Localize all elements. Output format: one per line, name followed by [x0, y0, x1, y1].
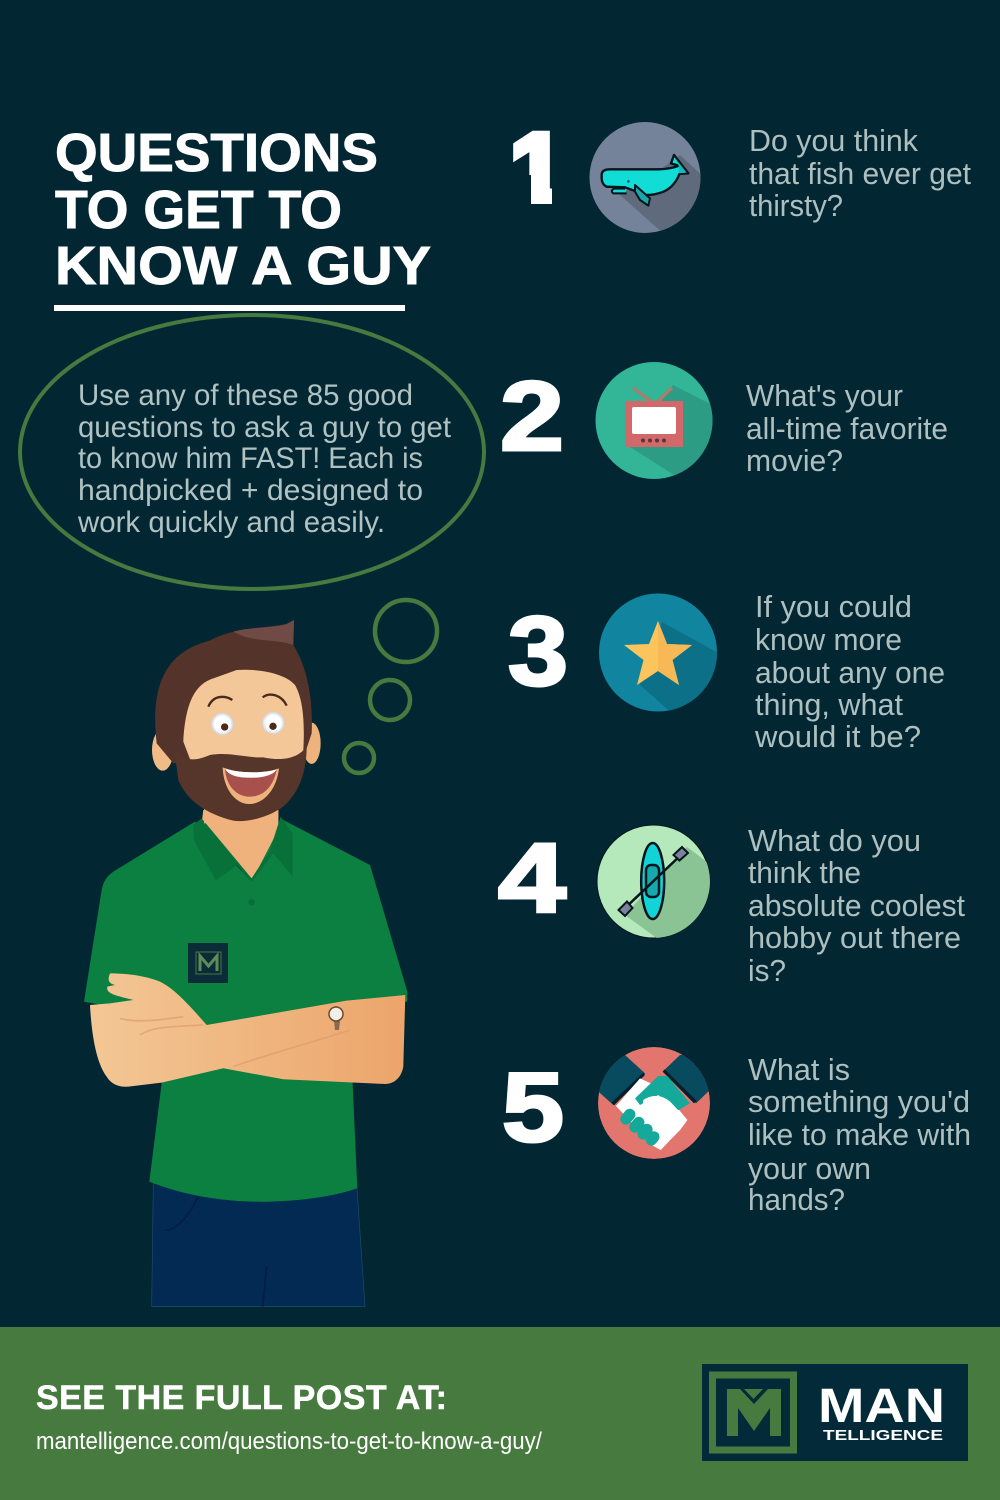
- question 1 text: Do you think: [749, 123, 918, 158]
- question 2 text: movie?: [746, 443, 843, 478]
- question 2 text: What's your: [746, 378, 903, 413]
- question 5 text: [748, 1052, 971, 1217]
- icon: handshake: [597, 1047, 712, 1159]
- title: QUESTIONS: [55, 123, 378, 183]
- question 5 text: your own: [748, 1151, 871, 1186]
- question 3 text: would it be?: [754, 719, 921, 754]
- icon: television: [596, 362, 722, 482]
- question 2 text: [746, 378, 948, 478]
- item 1: [510, 113, 971, 235]
- number 3: 3: [508, 596, 568, 706]
- question 4 text: What do you: [748, 823, 921, 858]
- character: man with crossed arms: [84, 620, 407, 1307]
- question 1 text: [749, 123, 971, 223]
- icon: star: [599, 594, 725, 716]
- question 5 text: something you'd: [748, 1084, 970, 1119]
- thought bubble with intro text: handpicked + designed to: [78, 474, 423, 507]
- icon: whale: [590, 122, 705, 235]
- footer band: [0, 1327, 1000, 1500]
- logo: [702, 1364, 968, 1461]
- question 4 text: hobby out there: [748, 920, 961, 955]
- head: [152, 620, 321, 823]
- footer heading: SEE THE FULL POST AT:: [36, 1379, 447, 1417]
- number 1: 1: [510, 113, 565, 223]
- thought bubbles: [344, 600, 437, 773]
- title underline: [54, 305, 405, 311]
- item 3: [508, 589, 945, 754]
- item 2: [500, 361, 948, 482]
- number 4: 4: [498, 823, 566, 933]
- logo: MAN: [818, 1380, 945, 1433]
- pants: [152, 1183, 365, 1307]
- item 5: [502, 1047, 971, 1217]
- wristwatch: [329, 1007, 343, 1030]
- question 3 text: thing, what: [755, 687, 903, 722]
- crossed arms: [90, 973, 405, 1087]
- question 1 text: thirsty?: [749, 188, 843, 223]
- thought bubble with intro text: to know him FAST! Each is: [78, 442, 423, 475]
- thought bubble with intro text: work quickly and easily.: [77, 506, 385, 539]
- title: TO GET TO: [55, 180, 342, 240]
- item 4: [498, 823, 965, 988]
- question 5 text: like to make with: [748, 1117, 971, 1152]
- icon: kayak: [597, 825, 715, 942]
- question 4 text: absolute coolest: [748, 888, 965, 923]
- question 3 text: about any one: [755, 655, 945, 690]
- question 4 text: is?: [748, 953, 786, 988]
- neck and shirt: [84, 810, 407, 1202]
- question 3 text: If you could: [755, 589, 912, 624]
- logo: TELLIGENCE: [823, 1427, 943, 1444]
- thought bubble with intro text: questions to ask a guy to get: [78, 411, 452, 444]
- shirt logo patch: [188, 943, 228, 983]
- question 5 text: hands?: [748, 1182, 845, 1217]
- question 3 text: [754, 589, 945, 754]
- question 5 text: What is: [748, 1052, 850, 1087]
- footer url: mantelligence.com/questions-to-get-to-know-a-guy/: [36, 1428, 542, 1455]
- thought bubble with intro text: [20, 315, 484, 589]
- title: [55, 123, 431, 296]
- title: KNOW A GUY: [55, 236, 431, 296]
- question 3 text: know more: [755, 622, 902, 657]
- question 2 text: all-time favorite: [746, 411, 948, 446]
- number 2: 2: [500, 361, 564, 471]
- question 4 text: think the: [748, 855, 861, 890]
- number 5: 5: [502, 1052, 564, 1162]
- question 4 text: [748, 823, 965, 988]
- question 1 text: that fish ever get: [749, 156, 971, 191]
- thought bubble with intro text: Use any of these 85 good: [78, 379, 413, 412]
